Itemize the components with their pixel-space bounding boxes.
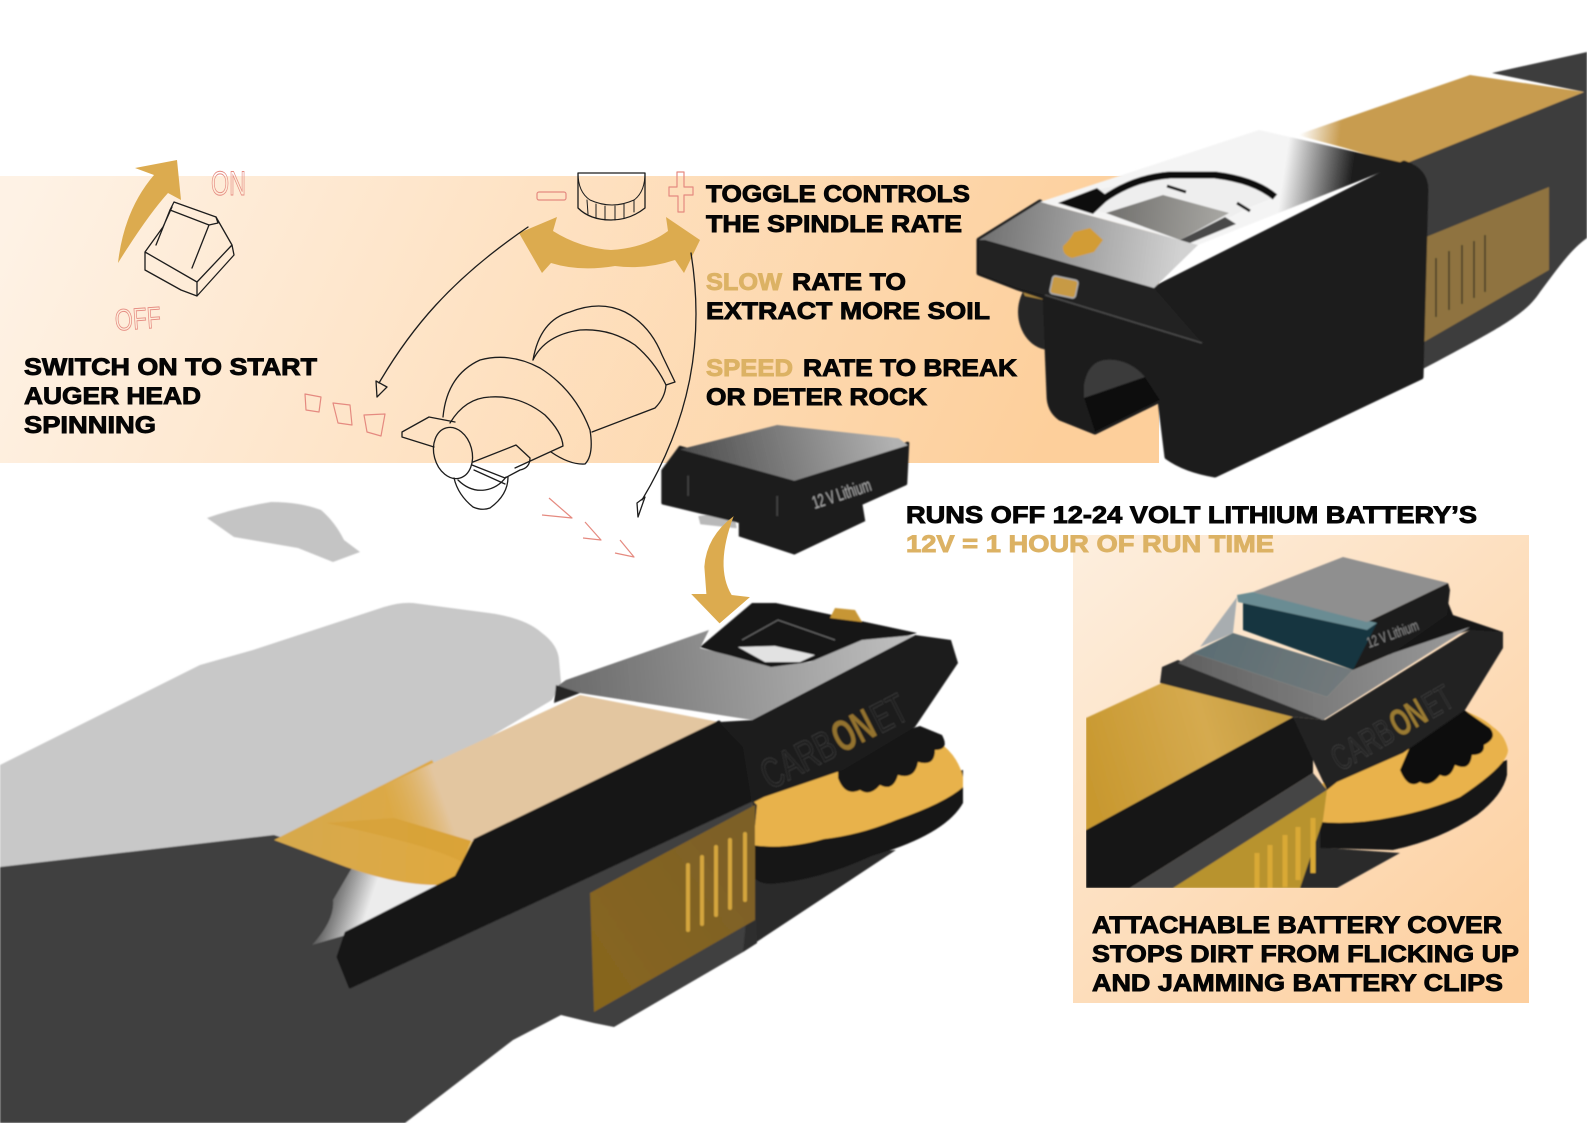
label: ON handwritten: ON xyxy=(211,165,246,203)
inset lower dark fill xyxy=(1299,829,1400,888)
housing top plate xyxy=(1040,130,1404,245)
brand ON: ON xyxy=(824,700,883,763)
dark back area behind bay xyxy=(700,603,917,670)
text: speed rate description xyxy=(706,355,1018,411)
white highlight on handle xyxy=(312,866,451,945)
dark round auger behind housing xyxy=(1018,274,1082,350)
inset battery label: 12 V Lithium xyxy=(1365,617,1421,652)
icon: gold double-headed arrow xyxy=(519,217,700,273)
text: toggle description xyxy=(706,181,970,238)
inset brand ON: ON xyxy=(1382,691,1435,746)
text: speed rate description: RATE TO BREAK xyxy=(803,355,1018,382)
inset gold plate xyxy=(1173,790,1327,888)
text: speed rate description: SPEED xyxy=(706,355,793,382)
icon: sketched rocker switch xyxy=(145,202,234,296)
side gold plate with vents xyxy=(1424,187,1549,342)
arch shadow xyxy=(1084,377,1160,432)
brand text on housing xyxy=(752,684,915,799)
inset gold top xyxy=(1086,683,1293,830)
render: 12V lithium battery xyxy=(663,425,908,555)
cover darker fold xyxy=(326,818,475,862)
text: attachable battery cover description: STOPS DIRT FROM FLICKING UP xyxy=(1092,941,1519,968)
label: OFF handwritten: OFF xyxy=(114,301,162,338)
icon: gold arrow pointing to ON xyxy=(118,160,181,263)
front lip xyxy=(979,202,1198,288)
arrow: thin curve toward fast rate xyxy=(637,253,696,517)
battery lower pad xyxy=(739,503,865,555)
text: slow rate description: RATE TO xyxy=(792,269,906,296)
battery metal contact xyxy=(698,511,737,528)
inset grey front plate xyxy=(1178,627,1470,720)
battery clip slits xyxy=(688,476,777,516)
battery bay interior xyxy=(738,620,835,662)
main render: auger with battery bay xyxy=(0,603,963,1123)
cream top of cover xyxy=(385,695,719,842)
black trough xyxy=(338,722,752,987)
auger disc yellow xyxy=(752,733,963,847)
inset grey strip xyxy=(1130,773,1327,888)
battery label: 12 V Lithium xyxy=(810,475,874,513)
text: switch on instruction: SPINNING xyxy=(24,412,156,439)
gold side plate xyxy=(590,805,755,1012)
icon: sketched auger head xyxy=(402,306,675,509)
inset vents xyxy=(1257,818,1313,888)
text: switch on instruction xyxy=(24,354,317,439)
black side of housing xyxy=(719,635,958,803)
arrow: gold battery insertion arrow xyxy=(691,516,750,623)
dark handle xyxy=(0,800,757,1123)
text: speed rate description: OR DETER ROCK xyxy=(706,384,928,411)
gold nose of battery cover xyxy=(274,760,475,885)
inset battery side xyxy=(1353,583,1450,670)
text: battery run time: RUNS OFF 12-24 VOLT LITHIUM BATTERY’S xyxy=(906,502,1477,529)
gold indicator window xyxy=(1049,275,1079,299)
icon: minus mark xyxy=(537,192,566,200)
inset black rear of housing xyxy=(1390,603,1503,654)
disc lower shadow wedge xyxy=(752,850,896,945)
text: battery run time xyxy=(906,502,1477,558)
icon: red motion chevrons xyxy=(542,498,634,557)
auger disc black rim xyxy=(752,770,963,884)
brand letters left: CARB xyxy=(753,721,844,798)
text: toggle description: THE SPINDLE RATE xyxy=(706,211,962,238)
text: slow rate description: EXTRACT MORE SOIL xyxy=(706,298,990,325)
battery body xyxy=(663,443,908,534)
arrow: thin curve toward slow rate xyxy=(376,227,528,397)
grey strip under trough xyxy=(743,800,757,952)
black housing body xyxy=(979,163,1426,475)
grey shadow of handle xyxy=(0,603,561,870)
battery top face xyxy=(680,425,908,481)
gold sliver of auger xyxy=(1022,290,1045,300)
panel: attachable battery cover background xyxy=(1073,535,1529,1003)
housing top plate xyxy=(556,630,915,720)
inset auger teeth xyxy=(1400,705,1493,784)
text: switch on instruction: AUGER HEAD xyxy=(24,383,201,410)
inset disc rim xyxy=(1320,760,1507,850)
inset disc yellow xyxy=(1320,707,1508,823)
inset glass cover xyxy=(1193,633,1353,697)
gold plate vents xyxy=(688,834,745,930)
inset teal cover xyxy=(1243,602,1377,670)
handle grip xyxy=(1400,52,1587,380)
inset brand left: CARB xyxy=(1324,710,1401,779)
background band: controls panel xyxy=(0,176,1159,463)
icon: sketched spindle rate toggle knob xyxy=(578,173,645,220)
text: slow rate description xyxy=(706,269,990,325)
text: attachable battery cover description: ATTACHABLE BATTERY COVER xyxy=(1092,912,1502,939)
text: switch on instruction: SWITCH ON TO START xyxy=(24,354,317,381)
text: battery run time: 12V = 1 HOUR OF RUN TIME xyxy=(906,531,1274,558)
arch opening in housing xyxy=(1084,360,1145,398)
gold top strip xyxy=(1297,75,1584,165)
inset battery top xyxy=(1253,557,1448,622)
inset housing side xyxy=(1293,628,1503,790)
gold switch on housing xyxy=(1063,228,1103,258)
housing front dark ledge xyxy=(979,240,1202,343)
housing left corner xyxy=(554,685,580,703)
inset clear cover back xyxy=(1200,597,1237,647)
battery bay opening xyxy=(1058,175,1275,243)
text: toggle description: TOGGLE CONTROLS xyxy=(706,181,970,208)
icon: plus mark xyxy=(669,172,693,212)
inset render: battery cover attached xyxy=(1086,557,1508,888)
inset black lip xyxy=(1160,660,1325,720)
text: attachable battery cover description xyxy=(1092,912,1519,997)
inset black trough xyxy=(1086,717,1313,888)
top-right product render: auger handle rear view xyxy=(979,52,1587,475)
text: attachable battery cover description: AND JAMMING BATTERY CLIPS xyxy=(1092,970,1503,997)
gold switch xyxy=(830,608,862,622)
inset brand text xyxy=(1332,684,1452,770)
auger teeth xyxy=(838,726,945,793)
brand letters right: ET xyxy=(863,684,915,742)
icon: grey shadow blob xyxy=(207,502,360,562)
inset brand right: ET xyxy=(1415,676,1460,726)
icon: red motion squares xyxy=(305,394,385,436)
text: slow rate description: SLOW xyxy=(706,269,782,296)
